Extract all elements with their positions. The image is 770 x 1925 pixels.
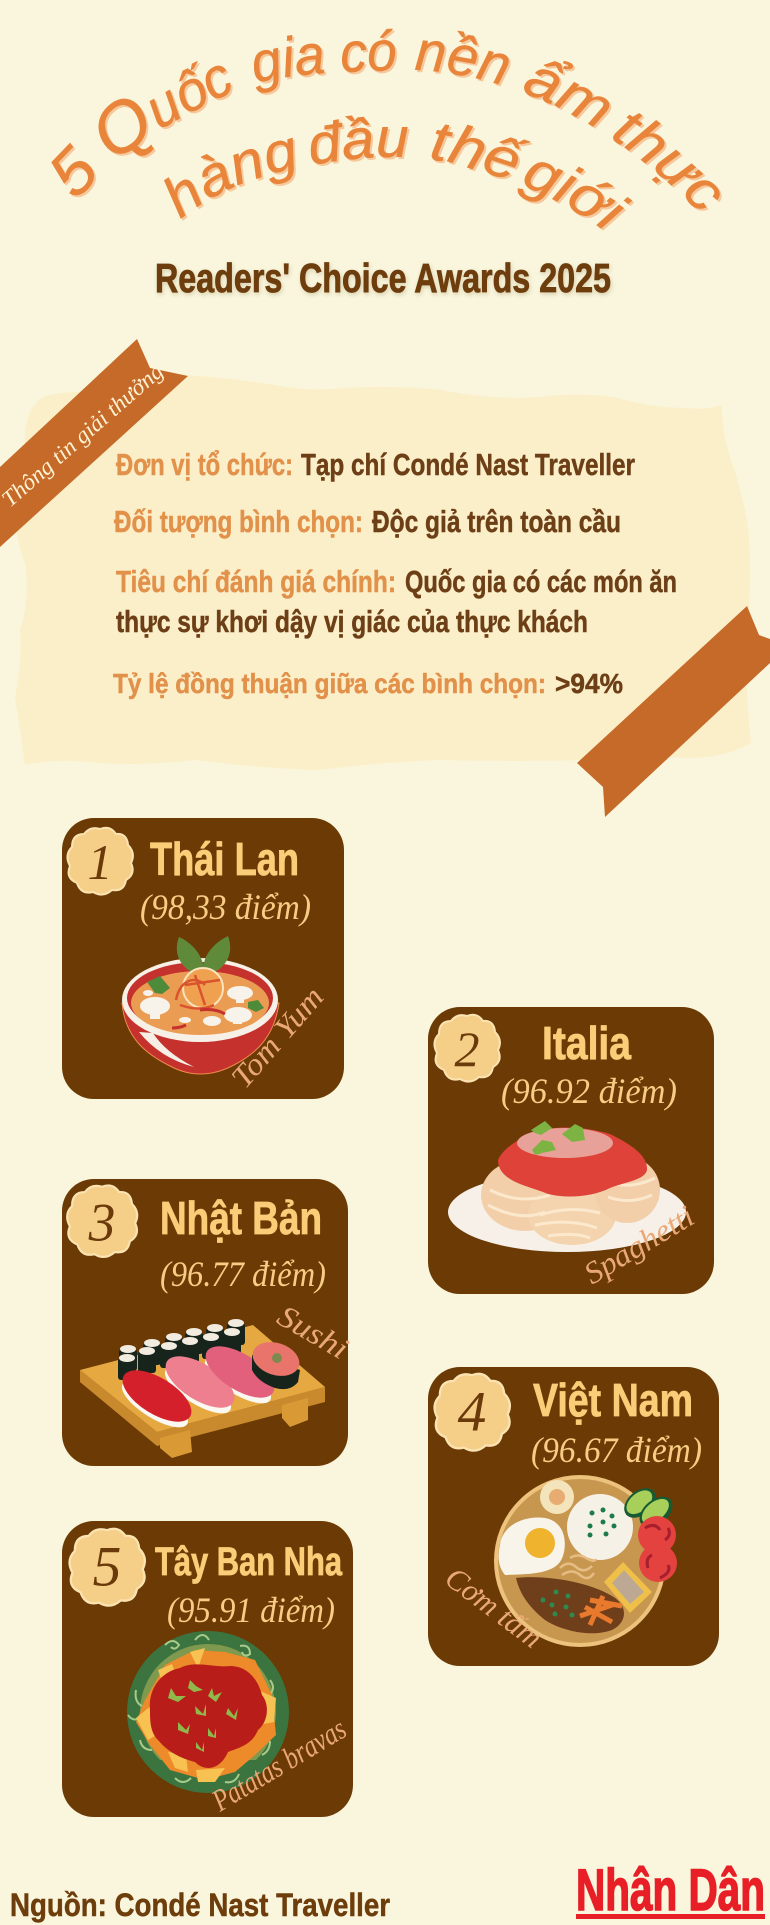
score: (96.77 điểm) (160, 1254, 326, 1294)
ribbon: bottom right (577, 606, 770, 817)
title (51, 28, 722, 230)
badge 5: 5 (93, 1535, 121, 1598)
panel: rank 5 Spain (62, 1521, 353, 1818)
badge 5 (70, 1529, 145, 1606)
text: consensus: Tỷ lệ đồng thuận giữa các bình chọn: (113, 668, 546, 699)
title: có (342, 28, 398, 74)
country name: Thái Lan (150, 833, 299, 885)
panel: rank 1 Thailand (62, 818, 344, 1099)
country name: Italia (542, 1017, 631, 1069)
badge 1 (67, 828, 133, 895)
badge 1: 1 (88, 834, 112, 890)
ribbon: top left with label (0, 339, 188, 547)
badge 3 (67, 1185, 137, 1257)
title: giới (518, 162, 634, 230)
badge 2: 2 (454, 1021, 480, 1077)
title: thực (613, 113, 722, 211)
country name: Việt Nam (533, 1374, 693, 1426)
text: voters (114, 504, 621, 539)
text: criteria: Tiêu chí đánh giá chính: (116, 564, 396, 599)
title: đầu (310, 116, 410, 166)
title: ẩm (524, 60, 612, 128)
text: criteria (116, 564, 677, 639)
text: voters: Đối tượng bình chọn: (114, 504, 363, 539)
score: (98,33 điểm) (140, 887, 311, 927)
icon: spaghetti (448, 1121, 686, 1252)
panel: rank 4 Vietnam (428, 1367, 719, 1666)
badge 4: 4 (458, 1380, 486, 1443)
dish name: Tom Yum (224, 980, 330, 1095)
title: Q (98, 98, 156, 158)
icon: com tam plate (496, 1477, 678, 1645)
icon: sushi (80, 1319, 325, 1458)
country name: Nhật Bản (160, 1192, 322, 1244)
dish name: Spaghetti (578, 1198, 700, 1291)
icon: patatas bravas (127, 1631, 289, 1793)
dish name: Cơm tấm (439, 1560, 549, 1655)
badge 3: 3 (88, 1192, 115, 1252)
country name: Tây Ban Nha (155, 1540, 343, 1584)
text: criteria: thực sự khơi dậy vị giác của thực khách (116, 604, 588, 639)
title: hàng (164, 138, 296, 221)
paper background (14, 375, 751, 770)
text: organizer: Tạp chí Condé Nast Traveller (301, 447, 635, 482)
title: uốc (150, 60, 233, 130)
icon: tom yum bowl (122, 936, 279, 1074)
dish name: Patatas bravas (205, 1711, 352, 1818)
badge 4 (435, 1374, 510, 1451)
score: (96.67 điểm) (531, 1430, 702, 1470)
text: consensus: >94% (555, 668, 623, 699)
title: 5 (51, 142, 96, 198)
title: thế (432, 124, 533, 180)
text: organizer (116, 447, 635, 482)
panel: award information (0, 339, 770, 817)
badge 2 (434, 1015, 500, 1082)
score: (96.92 điểm) (501, 1071, 677, 1111)
ribbon: top left with label: Thông tin giải thưởng (0, 358, 168, 512)
text: voters: Độc giả trên toàn cầu (372, 504, 621, 539)
subtitle: Readers' Choice Awards 2025 (155, 255, 611, 301)
text: organizer: Đơn vị tổ chức: (116, 447, 293, 482)
panel: rank 3 Japan (62, 1179, 355, 1466)
score: (95.91 điểm) (167, 1590, 335, 1630)
title: nền (414, 30, 511, 86)
panel: rank 2 Italy (428, 1007, 714, 1294)
text: criteria: Quốc gia có các món ăn (405, 564, 677, 599)
dish name: Sushi (272, 1298, 355, 1366)
title: gia (254, 35, 326, 95)
source: Nguồn: Condé Nast Traveller (10, 1887, 390, 1923)
